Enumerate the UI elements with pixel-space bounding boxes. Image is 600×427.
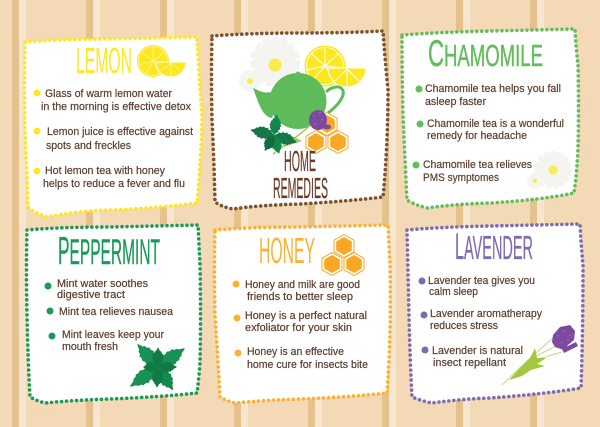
icon: green teapot xyxy=(253,72,343,129)
bullet list: chamomile: remedy for headache xyxy=(427,130,527,142)
panel: home remedies: REMEDIES xyxy=(273,173,328,205)
panel: peppermint: PEPPERMINT xyxy=(58,230,160,273)
bullet list: peppermint: digestive tract xyxy=(57,289,125,301)
icon: honeycomb xyxy=(322,234,364,276)
bullet list: chamomile: PMS symptomes xyxy=(423,172,499,184)
bullet list: honey: Honey and milk are good xyxy=(245,279,360,291)
icon: honeycomb xyxy=(306,112,348,154)
bullet list: honey: Honey is an effective xyxy=(247,346,344,358)
panel: home remedies xyxy=(212,31,388,209)
panel: lemon xyxy=(24,37,202,217)
icon: lemon slices xyxy=(304,46,366,87)
bullet list: peppermint xyxy=(44,278,174,353)
bullet list: lemon: in the morning is effective detox xyxy=(41,101,191,113)
bullet list: peppermint: Mint water soothes xyxy=(57,278,148,290)
bullet list: honey: Honey is a perfect natural xyxy=(245,310,367,322)
heading: home remedies xyxy=(273,146,328,205)
icon: lavender and stems xyxy=(273,110,331,154)
panel: lemon: LEMON xyxy=(76,40,132,81)
bullet list: lemon xyxy=(34,88,193,190)
bullet list: chamomile: Chamomile tea relieves xyxy=(423,159,532,171)
heading: home remedies: HOME xyxy=(284,146,316,178)
bullet list: lemon: Glass of warm lemon water xyxy=(45,88,172,100)
bullet list: lavender: insect repellant xyxy=(433,357,506,369)
panel: honey: HONEY xyxy=(259,230,315,271)
bullet list: chamomile: Chamomile tea helps you fall xyxy=(425,83,561,95)
icon: lemon slices xyxy=(137,45,186,77)
bullet list: honey xyxy=(232,279,368,371)
bullet list: honey: exfoliator for your skin xyxy=(245,322,352,334)
bullet list: lavender: calm sleep xyxy=(429,286,478,298)
panel: honey xyxy=(214,225,390,403)
bullet list: chamomile: asleep faster xyxy=(425,96,486,108)
bullet list: lavender: Lavender aromatherapy xyxy=(430,308,542,320)
bullet list: peppermint: Mint tea relieves nausea xyxy=(59,306,174,318)
bullet list: lavender: Lavender is natural xyxy=(432,345,523,357)
bullet list: honey: home cure for insects bite xyxy=(247,359,368,371)
icon: mint leaves xyxy=(125,339,189,394)
bullet list: lemon: spots and freckles xyxy=(46,140,131,152)
bullet list: lavender: Lavender tea gives you xyxy=(428,275,535,287)
panel: chamomile xyxy=(402,29,578,208)
bullet list: peppermint: Mint leaves keep your xyxy=(62,329,164,341)
icon: chamomile flowers xyxy=(528,153,570,188)
bullet list: lavender: reduces stress xyxy=(430,320,498,332)
bullet list: lemon: Hot lemon tea with honey xyxy=(45,165,165,177)
icon: chamomile flowers xyxy=(240,39,298,91)
icon: mint leaves xyxy=(249,114,299,155)
bullet list: lavender xyxy=(418,275,542,369)
panel: peppermint xyxy=(26,225,200,403)
bullet list: lemon: helps to reduce a fever and flu xyxy=(43,178,185,190)
icon: lavender bouquet xyxy=(502,325,578,385)
bullet list: honey: friends to better sleep xyxy=(247,291,353,303)
panel: lavender xyxy=(407,224,583,403)
bullet list: chamomile: Chamomile tea is a wonderful xyxy=(427,118,564,130)
bullet list: chamomile xyxy=(412,83,564,184)
bullet list: peppermint: mouth fresh xyxy=(62,341,118,353)
bullet list: lemon: Lemon juice is effective against xyxy=(47,126,193,138)
